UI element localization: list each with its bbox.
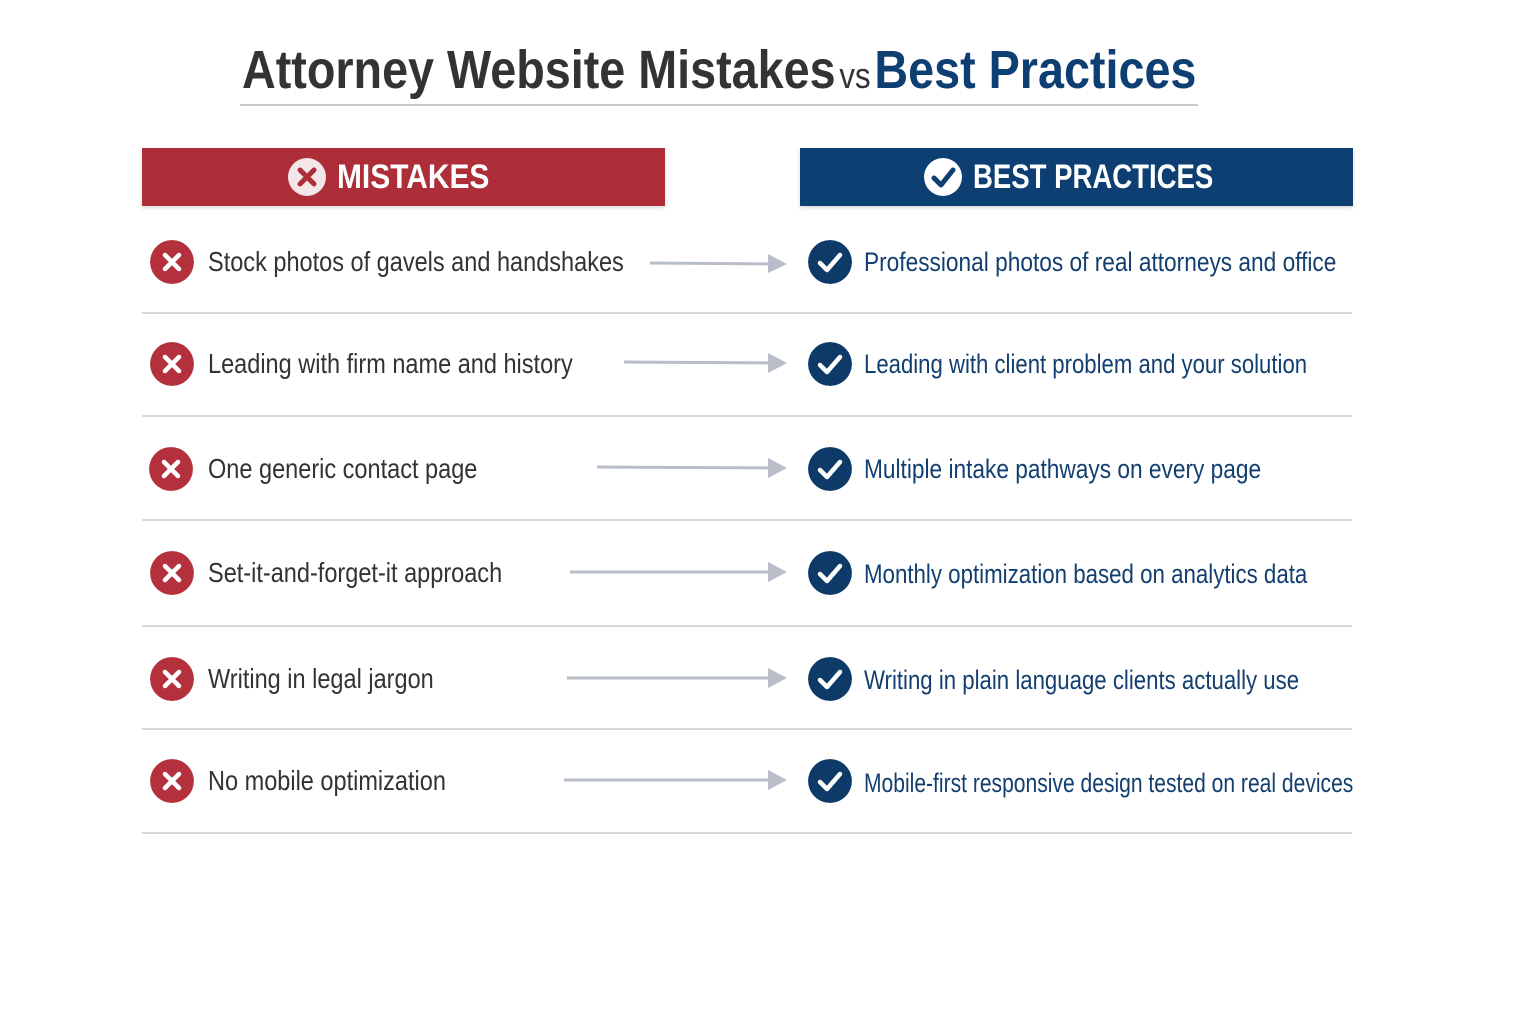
icon: header check [924, 158, 962, 196]
row 5: Writing in legal jargon [208, 663, 434, 694]
title: Attorney Website Mistakes vs Best Practices [242, 40, 1196, 100]
row 6: Mobile-first responsive design tested on real devices [864, 768, 1353, 798]
row 5: Writing in plain language clients actually use [864, 665, 1299, 695]
row 2 [142, 313, 1352, 417]
row 6: No mobile optimization [208, 765, 446, 796]
row 5 [142, 626, 1352, 730]
row 3 [142, 417, 1352, 521]
icon: header x [288, 158, 326, 196]
row 1: Stock photos of gavels and handshakes [208, 246, 624, 277]
row 4: Set-it-and-forget-it approach [208, 557, 502, 588]
row 3: Multiple intake pathways on every page [864, 454, 1261, 484]
row 1 [142, 210, 1352, 314]
header: best practices: BEST PRACTICES [973, 158, 1213, 196]
row 2: Leading with firm name and history [208, 348, 573, 379]
row 1: Professional photos of real attorneys and office [864, 247, 1336, 277]
header: best practices [800, 148, 1353, 206]
header: mistakes: MISTAKES [337, 158, 489, 196]
header: mistakes [142, 148, 665, 206]
row 6 [142, 730, 1352, 834]
row 3: One generic contact page [208, 453, 477, 484]
row 4 [142, 523, 1352, 627]
row 2: Leading with client problem and your solution [864, 349, 1307, 379]
row 4: Monthly optimization based on analytics data [864, 559, 1307, 589]
